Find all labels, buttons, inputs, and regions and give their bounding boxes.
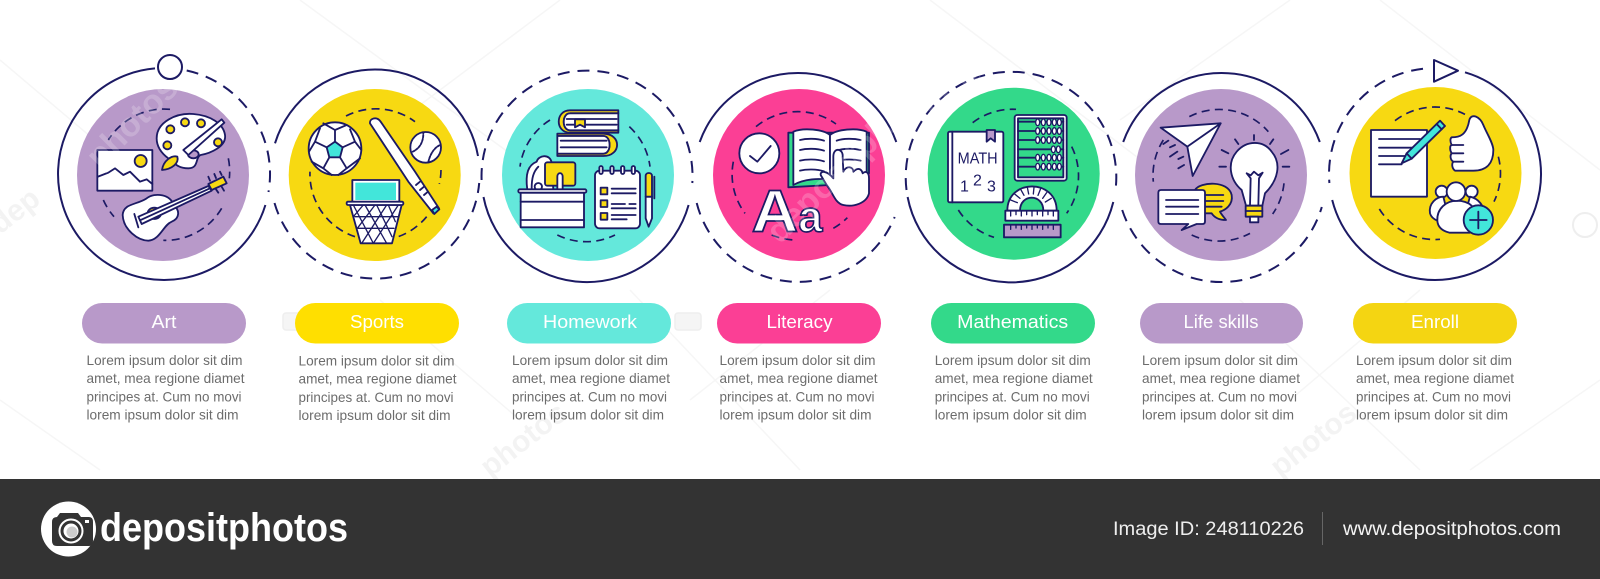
text: Enroll body: Lorem ipsum dolor sit dim xyxy=(1356,352,1512,368)
disc: Sports xyxy=(289,89,461,261)
watermark on discs xyxy=(79,42,1002,251)
start marker xyxy=(158,55,182,79)
text: Life skills body xyxy=(1142,352,1300,422)
website: www.depositphotos.com xyxy=(1342,519,1561,540)
pill: Enroll xyxy=(1353,303,1517,344)
ring: Literacy xyxy=(697,73,896,282)
text: Mathematics body: Lorem ipsum dolor sit dim xyxy=(935,352,1091,368)
protractor and ruler xyxy=(1004,186,1061,237)
label: Art: Art xyxy=(152,312,176,332)
math book text: MATH xyxy=(958,150,998,167)
disc: Enroll xyxy=(1350,87,1522,259)
label: Life skills: Life skills xyxy=(1184,312,1258,332)
text: Art body: lorem ipsum dolor sit dim xyxy=(86,406,238,422)
panel: Homework xyxy=(482,71,693,422)
text: Life skills body: amet, mea regione diamet xyxy=(1142,370,1300,386)
text: Enroll body: lorem ipsum dolor sit dim xyxy=(1356,406,1508,422)
text: Art body: principes at. Cum no movi xyxy=(86,388,242,404)
text: Aa xyxy=(752,178,823,245)
pill: Literacy xyxy=(717,303,881,344)
text: Sports body: Lorem ipsum dolor sit dim xyxy=(298,352,454,368)
label: Sports: Sports xyxy=(350,312,404,332)
math book text: 2 xyxy=(973,172,982,189)
text: Mathematics body: lorem ipsum dolor sit dim xyxy=(935,406,1087,422)
icon: literacy xyxy=(732,112,869,245)
label: Homework: Homework xyxy=(543,312,638,332)
text: Literacy body: amet, mea regione diamet xyxy=(720,370,878,386)
text: Sports body xyxy=(298,352,457,423)
ring: Enroll xyxy=(1329,69,1541,280)
disc: Mathematics xyxy=(928,88,1100,260)
icon: mathematics xyxy=(948,109,1079,237)
pill: Sports xyxy=(295,303,459,344)
pill: Mathematics xyxy=(931,303,1095,344)
icon: homework xyxy=(518,110,654,242)
ring: Art xyxy=(58,68,270,280)
disc: Homework xyxy=(502,89,674,261)
ring: Homework xyxy=(482,71,693,282)
logo: camera xyxy=(41,502,96,556)
pill: Homework xyxy=(507,303,671,344)
icon: sports gear xyxy=(309,109,441,243)
end arrow xyxy=(1434,60,1458,82)
icon: enroll xyxy=(1371,107,1500,240)
math book text: 3 xyxy=(987,178,996,195)
image id: Image ID: 248110226 xyxy=(1113,519,1304,540)
text: Sports body: lorem ipsum dolor sit dim xyxy=(298,407,450,423)
disc: Life skills xyxy=(1135,89,1307,261)
text: Art body xyxy=(86,352,245,422)
text: Homework body: lorem ipsum dolor sit dim xyxy=(512,406,664,422)
disc: Literacy xyxy=(713,89,885,261)
text: Enroll body: principes at. Cum no movi xyxy=(1356,388,1511,404)
text: Enroll body: amet, mea regione diamet xyxy=(1356,370,1514,386)
text: Literacy body: lorem ipsum dolor sit dim xyxy=(720,406,872,422)
ring: Mathematics xyxy=(906,72,1116,282)
pill: Life skills xyxy=(1140,303,1303,344)
text: Life skills body: lorem ipsum dolor sit dim xyxy=(1142,406,1294,422)
ring: Life skills xyxy=(1122,73,1322,282)
watermark on discs: photo xyxy=(909,42,1002,136)
text: Mathematics body: amet, mea regione diamet xyxy=(935,370,1093,386)
text: photos xyxy=(1264,396,1363,484)
icon: life skills xyxy=(1153,109,1289,241)
panel: Life skills xyxy=(1122,73,1322,423)
text: Homework body xyxy=(512,352,670,422)
text: Homework body: principes at. Cum no movi xyxy=(512,388,667,404)
math book text xyxy=(958,150,998,195)
label: Literacy: Literacy xyxy=(766,312,832,332)
text: Aa: A xyxy=(752,178,798,245)
panel: Sports xyxy=(274,69,479,423)
logo: wordmark: depositphotos xyxy=(100,506,348,550)
text: Literacy body: Lorem ipsum dolor sit dim xyxy=(720,352,876,368)
text: Enroll body xyxy=(1356,352,1514,422)
text: Literacy body: principes at. Cum no movi xyxy=(720,388,874,404)
panel: Enroll xyxy=(1329,60,1541,422)
text: Literacy body xyxy=(720,352,878,422)
text: Aa: a xyxy=(798,194,823,242)
pill: Art xyxy=(82,303,246,344)
watermark on discs: depositphotos xyxy=(759,58,951,251)
text: Sports body: principes at. Cum no movi xyxy=(298,389,454,405)
text: Homework body: Lorem ipsum dolor sit dim xyxy=(512,352,668,368)
watermark on discs: photos xyxy=(79,69,186,176)
abacus beads xyxy=(1036,119,1061,170)
text: Life skills body: principes at. Cum no movi xyxy=(1142,388,1297,404)
disc: Art xyxy=(77,89,249,261)
panel: Literacy xyxy=(697,73,896,423)
footer bar xyxy=(0,479,1600,579)
math book text: 1 xyxy=(960,178,969,195)
label: Enroll: Enroll xyxy=(1411,312,1459,332)
label: Mathematics: Mathematics xyxy=(957,312,1068,332)
text: Life skills body: Lorem ipsum dolor sit dim xyxy=(1142,352,1298,368)
panel: Art xyxy=(58,55,270,422)
text: Sports body: amet, mea regione diamet xyxy=(298,370,457,386)
text: Mathematics body: principes at. Cum no movi xyxy=(935,388,1090,404)
icon: art supplies xyxy=(97,109,230,241)
text: Art body: Lorem ipsum dolor sit dim xyxy=(86,352,242,368)
text: Mathematics body xyxy=(935,352,1093,422)
divider xyxy=(1322,512,1323,545)
ring: Sports xyxy=(274,69,479,279)
panel: Mathematics xyxy=(906,72,1116,422)
text: Homework body: amet, mea regione diamet xyxy=(512,370,670,386)
text: Art body: amet, mea regione diamet xyxy=(86,370,245,386)
text: photos xyxy=(474,396,573,484)
